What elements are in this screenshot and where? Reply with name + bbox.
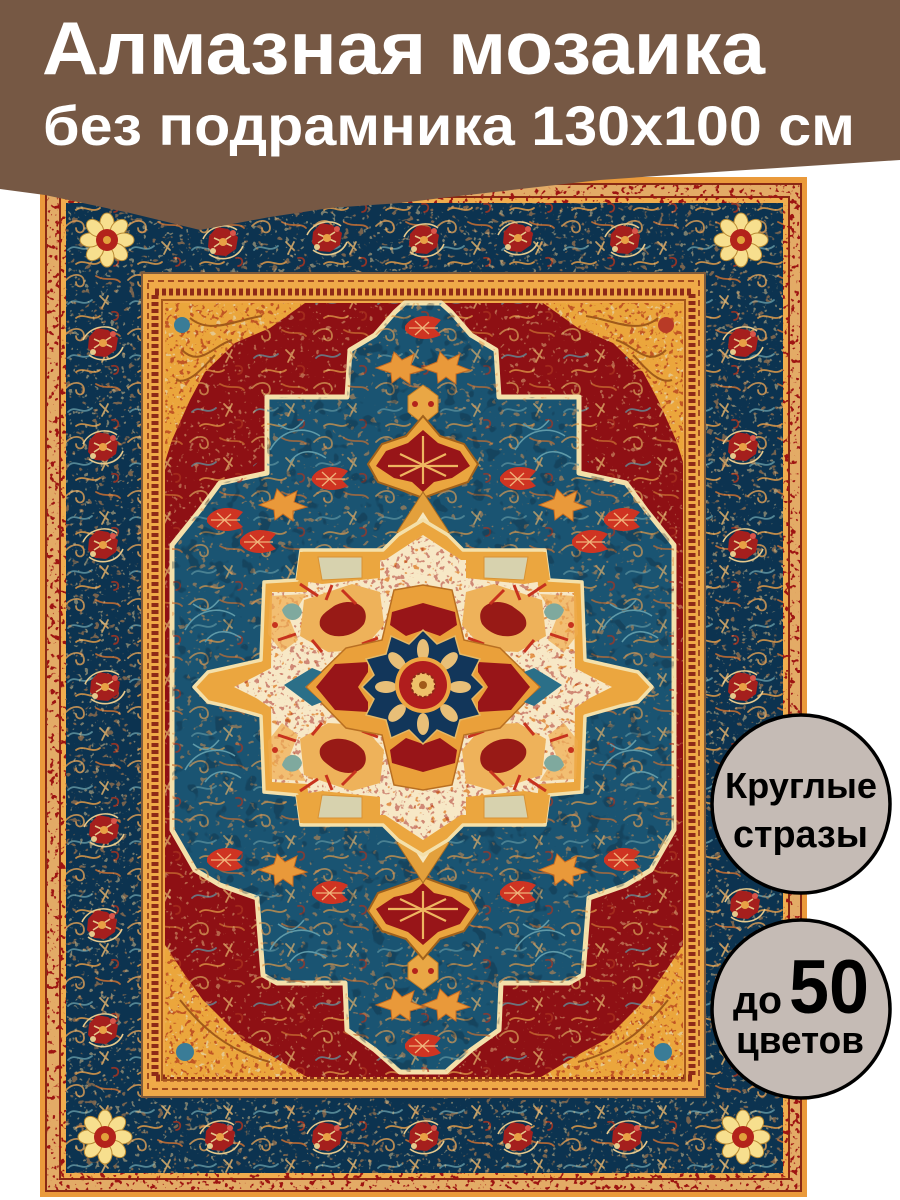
carpet image (40, 177, 807, 1197)
gold corners (165, 303, 683, 1077)
badge: up to 50 colours: цветов (736, 1020, 864, 1062)
blue border panel (66, 203, 783, 1173)
badge: round rhinestones: стразы (733, 814, 868, 856)
central medallion (194, 520, 652, 855)
header banner (0, 0, 900, 230)
badge: up to 50 colours: до (733, 980, 782, 1022)
badge: round rhinestones (712, 715, 890, 893)
title: Алмазная мозаика (42, 6, 766, 90)
gold corner flecks (165, 303, 683, 1077)
badge: up to 50 colours (712, 920, 890, 1098)
subtitle: без подрамника 130х100 см (43, 94, 855, 157)
badge: round rhinestones: Круглые (725, 765, 877, 806)
medallion interior flecks (234, 535, 612, 840)
badge: up to 50 colours: 50 (789, 945, 869, 1030)
navy flower (362, 630, 484, 744)
border flowers (78, 213, 770, 1164)
centre rosette (395, 657, 451, 713)
field with red and gold corners (165, 303, 683, 1077)
side teal accents (284, 668, 562, 706)
top spindle ornament (368, 385, 478, 552)
carpet outer band (40, 177, 807, 1197)
red petals (390, 603, 457, 636)
field flowers (185, 316, 658, 1057)
bottom spindle ornament (368, 823, 478, 990)
medallion cream interior (234, 535, 612, 840)
inner gold frame (142, 273, 705, 1097)
medallion gold outline (194, 520, 652, 855)
gold petal backing (306, 585, 540, 790)
blue central field (165, 303, 683, 1077)
quadrant ornaments (268, 552, 384, 661)
